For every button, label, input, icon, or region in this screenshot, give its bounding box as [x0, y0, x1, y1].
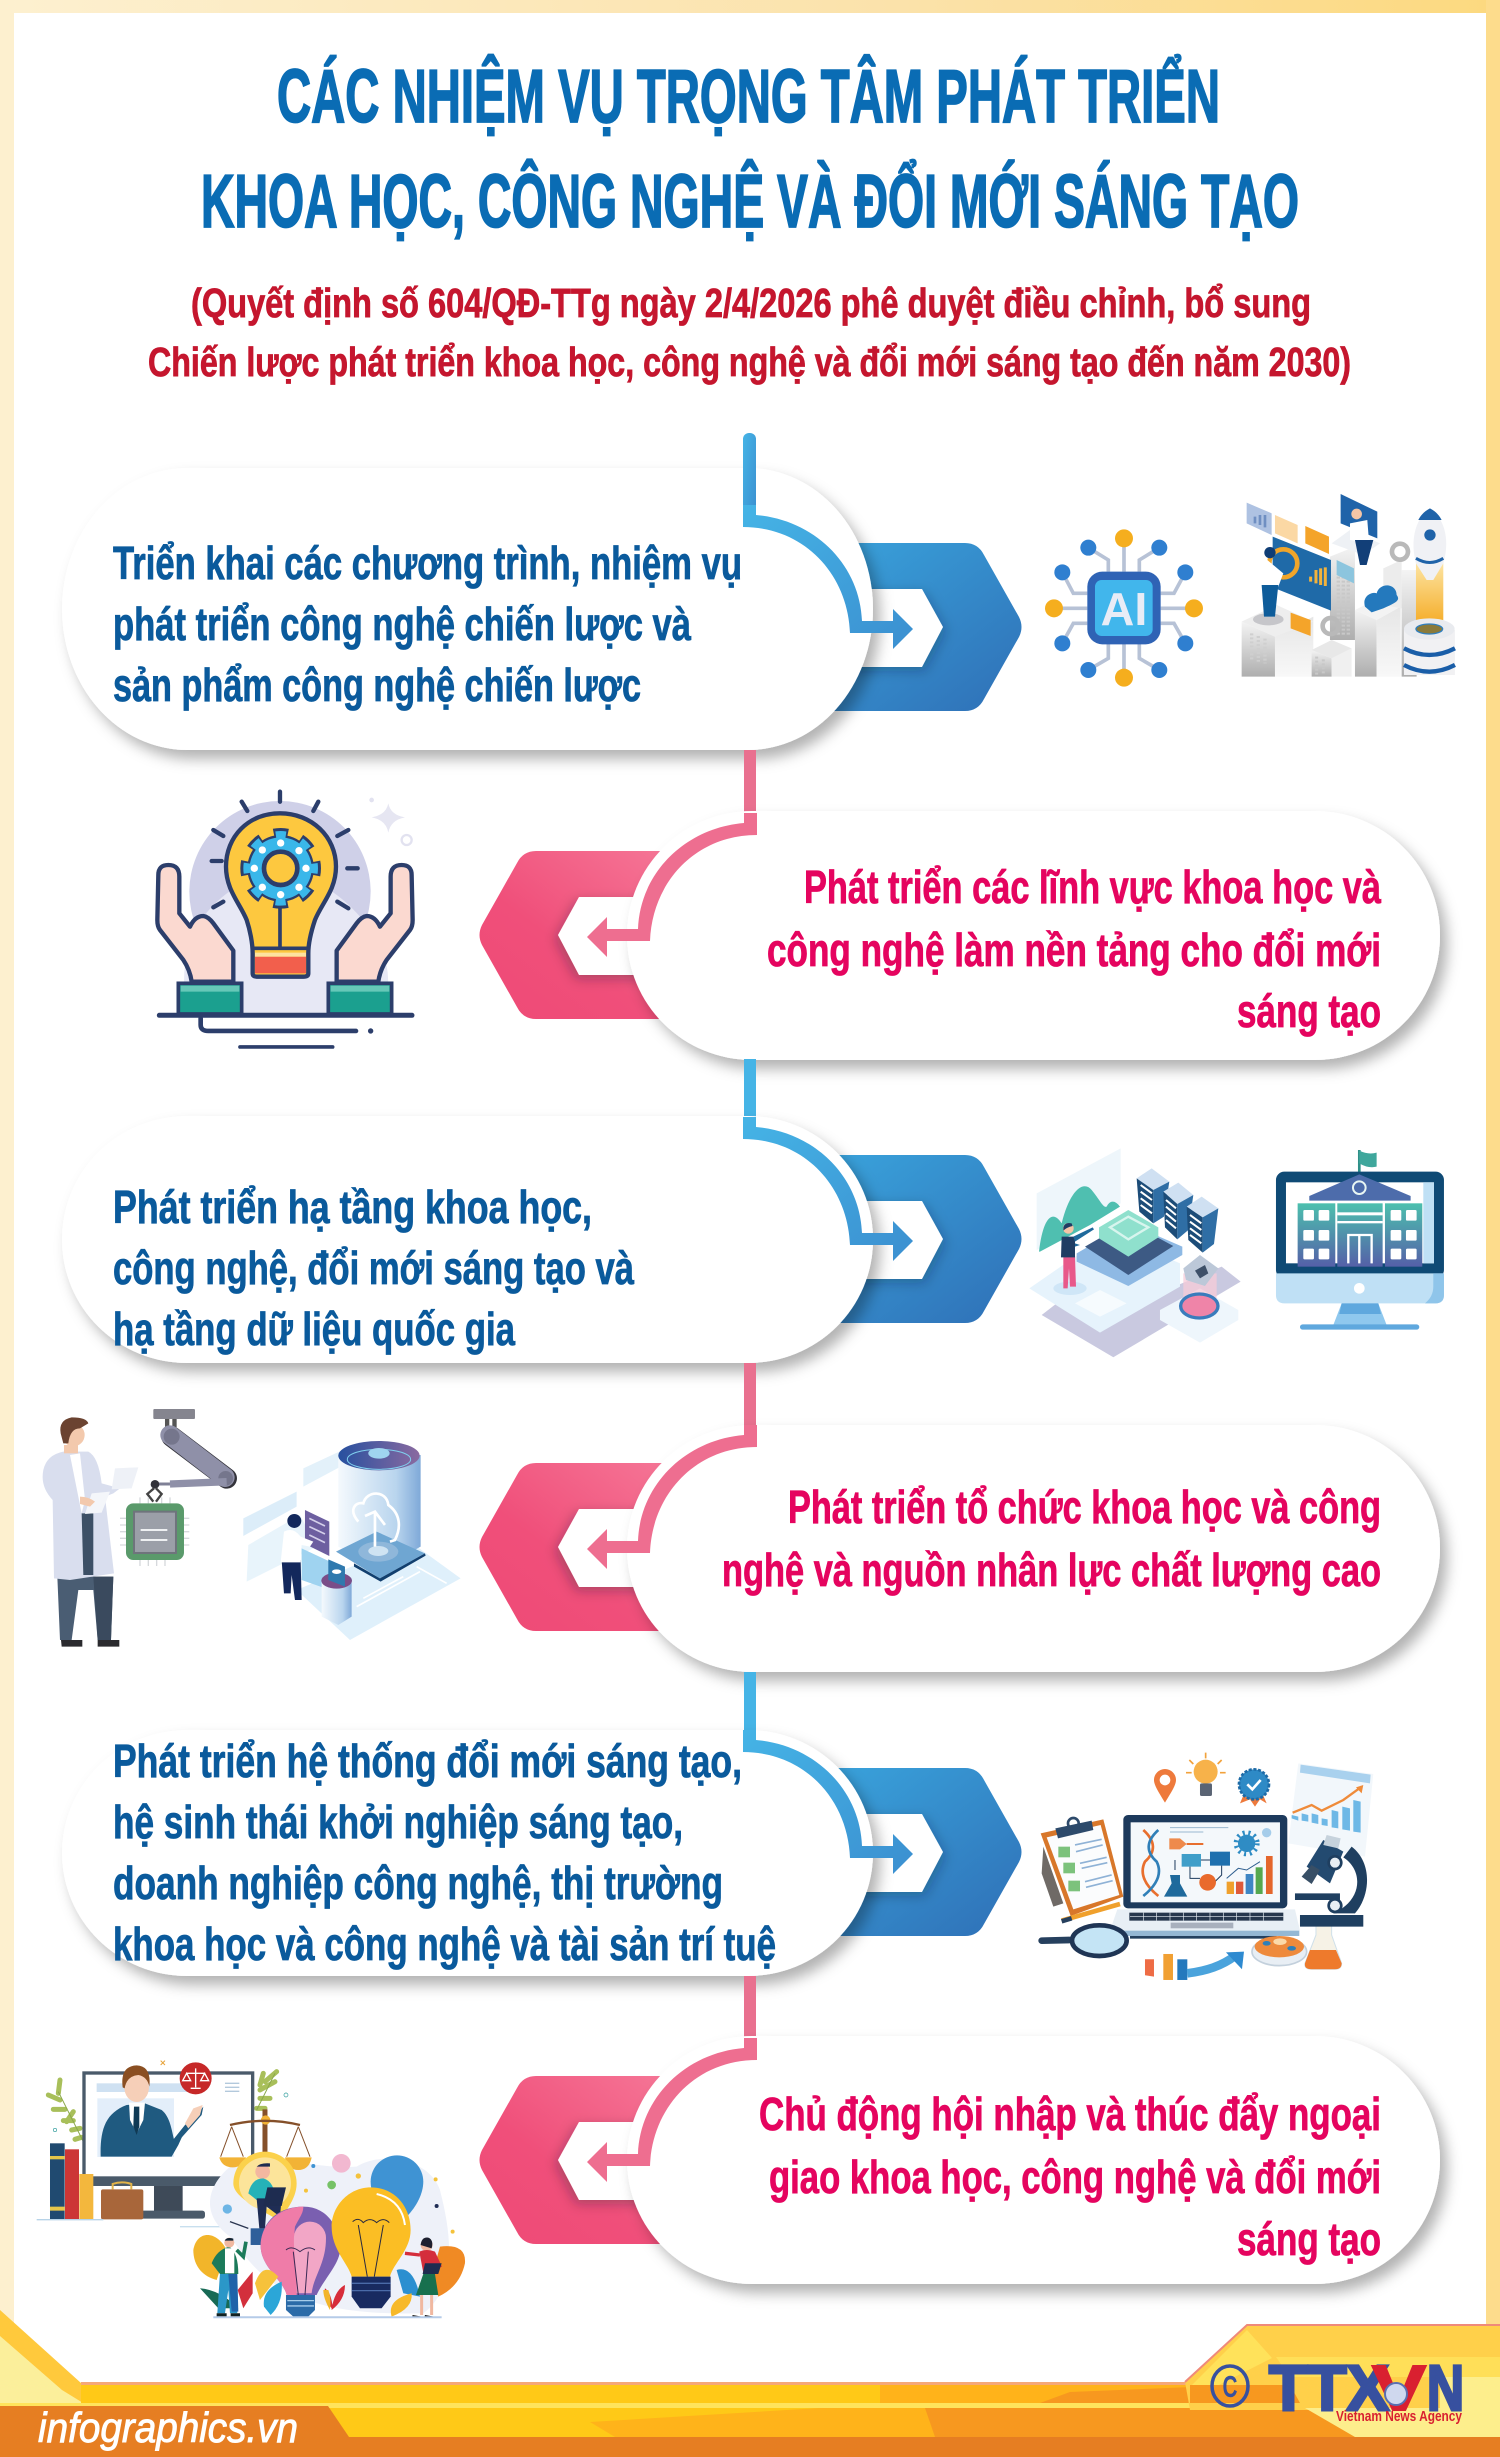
panel: task 5 — [62, 1672, 1022, 1976]
panel: task 5: Phát triển hệ thống đổi mới sáng tạo, — [113, 1735, 742, 1787]
panel: task 1 — [62, 433, 1022, 750]
title — [201, 54, 1299, 243]
panel: task 3 — [62, 1059, 1022, 1363]
icon: AI chip — [1045, 529, 1203, 687]
logo: TTXVN: N — [1427, 2352, 1464, 2424]
icon: scientist and robot arm — [43, 1409, 233, 1647]
website label: infographics.vn — [38, 2404, 298, 2451]
subtitle — [148, 280, 1351, 385]
panel: task 3: Phát triển hạ tầng khoa học, — [113, 1181, 592, 1233]
panel: task 1: Triển khai các chương trình, nhiệm vụ — [113, 537, 742, 589]
icon: AI chip: AI — [1101, 583, 1147, 635]
panel: task 6: sáng tạo — [1237, 2213, 1381, 2265]
icon: laptop with science tools — [1041, 1753, 1373, 1980]
panel: task 2: sáng tạo — [1237, 985, 1381, 1037]
icon: hands holding light bulb — [157, 792, 413, 1047]
panel: task 3: hạ tầng dữ liệu quốc gia — [113, 1303, 515, 1355]
logo: TTXVN: V — [1372, 2352, 1426, 2424]
panel: task 5: khoa học và công nghệ và tài sản trí tuệ — [113, 1918, 776, 1970]
icon: isometric data centre — [1029, 1148, 1241, 1357]
panel: task 1: sản phẩm công nghệ chiến lược — [113, 659, 641, 711]
panel: task 2 — [480, 750, 1440, 1060]
panel: task 3: công nghệ, đổi mới sáng tạo và — [113, 1242, 634, 1294]
logo: TTXVN — [1212, 2352, 1464, 2425]
icon: school on monitor — [1276, 1150, 1444, 1330]
logo: TTXVN: Vietnam News Agency — [1336, 2408, 1463, 2425]
icon: digital city and rocket — [1242, 494, 1455, 677]
logo: TTXVN: C — [1222, 2369, 1238, 2404]
icon: online lawyer and idea bulbs — [37, 2061, 465, 2318]
panel: task 6 — [480, 1976, 1440, 2284]
panel: task 5: hệ sinh thái khởi nghiệp sáng tạo, — [113, 1796, 683, 1848]
footer band — [0, 2310, 1500, 2457]
logo: TTXVN: TTX — [1269, 2352, 1389, 2424]
panel: task 4 — [480, 1363, 1440, 1672]
panel: task 5: doanh nghiệp công nghệ, thị trường — [113, 1857, 723, 1909]
panel: task 1: phát triển công nghệ chiến lược và — [113, 598, 691, 650]
icon: isometric cloud data server — [243, 1441, 461, 1640]
